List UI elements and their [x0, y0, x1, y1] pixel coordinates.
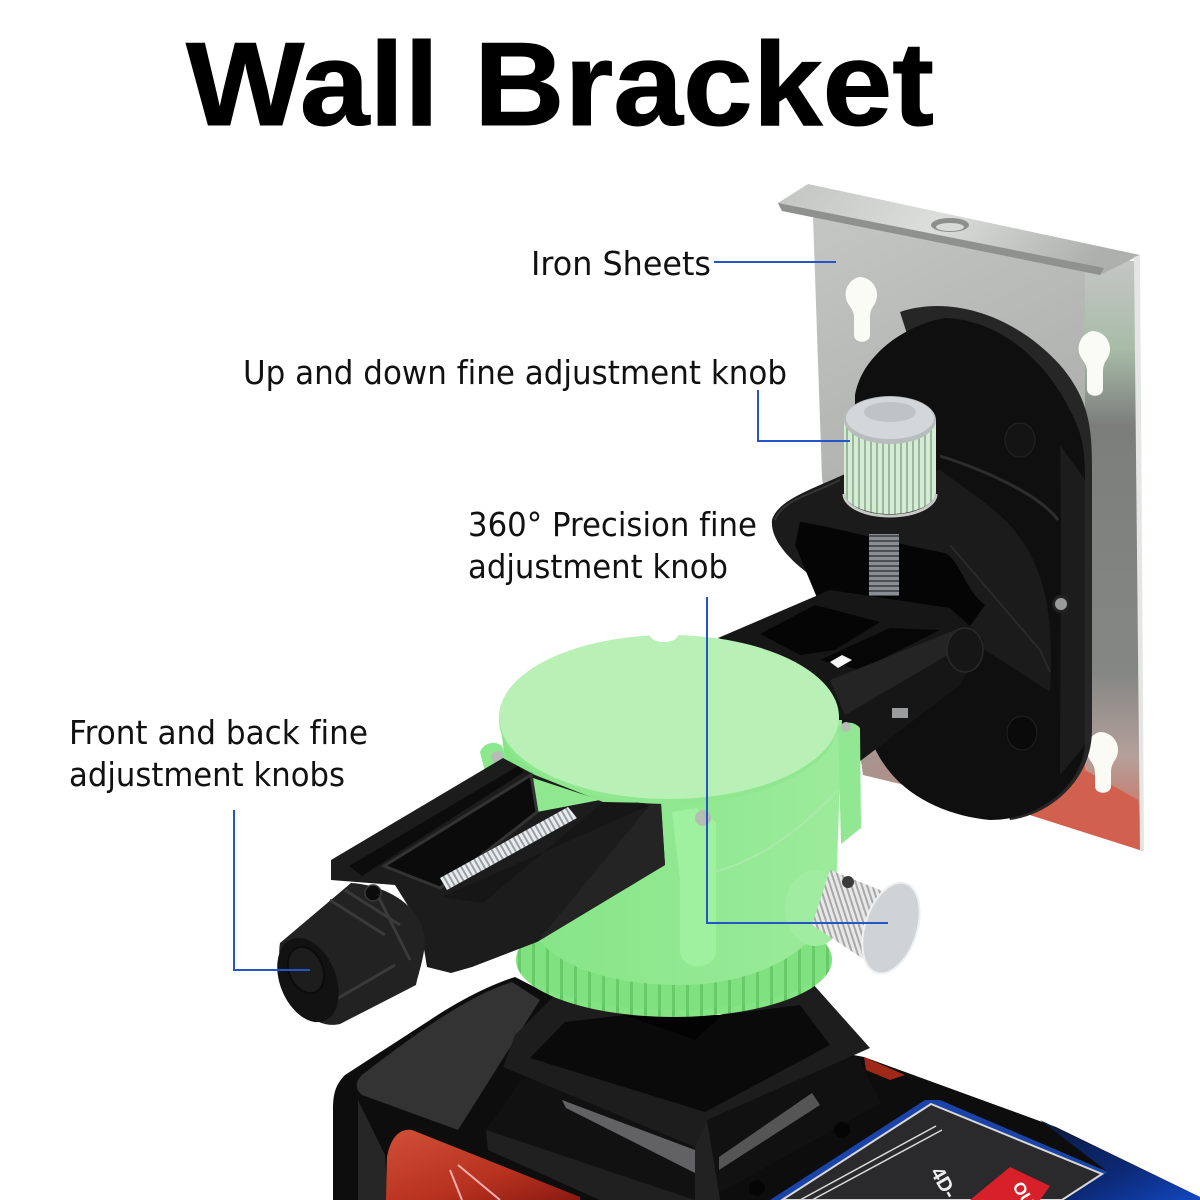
green cylinder top cap: [499, 635, 839, 804]
black rear mounting plate: [855, 306, 1092, 820]
green cylinder body: [480, 720, 861, 985]
laser level body: [333, 977, 1200, 1200]
black tripod mount: [486, 983, 881, 1200]
U-shaped knob arm: [772, 470, 1051, 692]
product label plate: [770, 1100, 1108, 1200]
label: front and back fine adjustment knobs: adjustment knobs: [69, 755, 345, 794]
threaded rod: [440, 807, 577, 890]
rear rail arm: [718, 590, 985, 765]
label: up and down fine adjustment knob: [243, 353, 850, 441]
iron sheet wall plate: [778, 184, 1144, 851]
green base ring: [516, 903, 832, 1017]
label: 360 precision fine adjustment knob: [468, 505, 888, 923]
up and down fine adjustment knob: [844, 396, 936, 516]
label: front and back fine adjustment knobs: [69, 713, 368, 970]
label: up and down fine adjustment knob: Up and down fine adjustment knob: [243, 353, 787, 392]
threaded adjustment bolt: [869, 534, 899, 596]
label: 360 precision fine adjustment knob: 360° Precision fine: [468, 505, 757, 544]
title: Wall Bracket: [186, 18, 934, 151]
label: 360 precision fine adjustment knob: adjustment knob: [468, 547, 728, 586]
front adjustment rail: [331, 758, 665, 973]
label: iron sheets: Iron Sheets: [531, 244, 711, 283]
front and back knob: [266, 883, 425, 1031]
360 degree precision knob: [785, 870, 930, 981]
label: front and back fine adjustment knobs: Front and back fine: [69, 713, 368, 752]
